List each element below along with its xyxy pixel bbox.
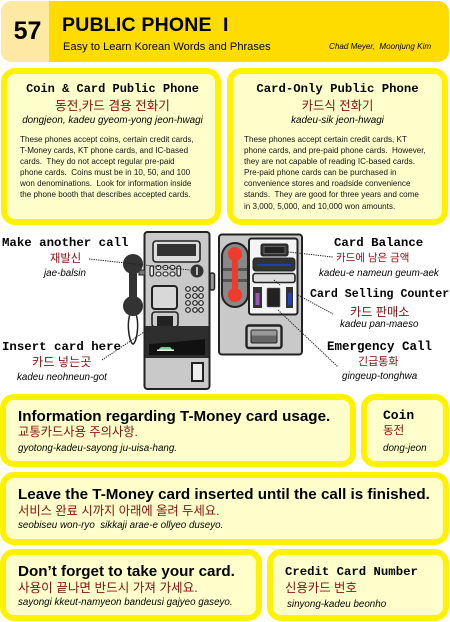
- label korean: 카드에 남은 금액: [336, 252, 409, 264]
- description: they are not capable of reading IC-based cards.: [244, 157, 415, 166]
- description: [244, 135, 426, 211]
- panel: leave the card inserted: [0, 472, 449, 545]
- romanization: dong-jeon: [383, 443, 427, 454]
- label heading: Card Selling Counter: [310, 288, 449, 301]
- term: Coin: [383, 408, 414, 423]
- description: convenience stores and roadside convenience: [244, 179, 410, 188]
- label romanization: kadeu-e nameun geum-aek: [319, 268, 439, 279]
- romanization: gyotong-kadeu-sayong ju-uisa-hang.: [18, 443, 177, 454]
- panel heading: Card-Only Public Phone: [256, 82, 419, 96]
- label korean: 긴급통화: [358, 356, 398, 368]
- korean: 신용카드 번호: [285, 581, 357, 595]
- korean: 사용이 끝나면 반드시 가져 가세요.: [18, 581, 198, 595]
- korean: 서비스 완료 시까지 아래에 올려 두세요.: [18, 504, 220, 518]
- label romanization: jae-balsin: [44, 268, 86, 279]
- label romanization: gingeup-tonghwa: [342, 371, 417, 382]
- label: card selling counter: [310, 288, 449, 330]
- description: phone cards. Coins must be in 10, 50, and 100: [20, 168, 190, 177]
- label: card balance: [319, 236, 440, 279]
- title: PUBLIC PHONE I: [62, 14, 229, 36]
- korean: 동전: [383, 425, 404, 437]
- header banner: [1, 1, 449, 62]
- panel heading: Coin & Card Public Phone: [26, 82, 199, 96]
- label: insert card here: [2, 340, 121, 383]
- romanization: sayongi kkeut-namyeon bandeusi gajyeo gaseyo.: [18, 597, 233, 608]
- panel: t-money information: [0, 394, 356, 467]
- label heading: Make another call: [2, 236, 128, 250]
- panel: coin: [361, 394, 449, 467]
- description: stands. They are good for three years and come: [244, 190, 419, 199]
- card-only phone: [219, 234, 302, 354]
- label romanization: kadeu pan-maeso: [340, 319, 418, 330]
- authors: Chad Meyer, Moonjung Kim: [329, 42, 431, 51]
- label korean: 재발신: [50, 253, 81, 265]
- description: These phones accept certain credit cards, KT: [244, 135, 407, 144]
- label heading: Insert card here: [2, 340, 121, 354]
- panel: don't forget card: [0, 549, 262, 621]
- korean term: 동전,카드 겸용 전화기: [55, 99, 170, 113]
- label heading: Emergency Call: [327, 340, 432, 354]
- leader lines: [89, 252, 338, 367]
- description: won denominations. Look for information inside: [20, 179, 191, 188]
- illustration: two public phones: [88, 231, 338, 390]
- panel: credit card number: [267, 549, 449, 621]
- label heading: Card Balance: [334, 236, 423, 250]
- label romanization: kadeu neohneun-got: [17, 372, 107, 383]
- phrase: Information regarding T-Money card usage.: [18, 408, 330, 425]
- description: [20, 135, 194, 199]
- coin and card phone: [144, 232, 214, 389]
- description: T-Money cards, KT phone cards, and IC-based: [20, 146, 188, 155]
- term: Credit Card Number: [285, 565, 418, 579]
- label: make another call: [2, 236, 128, 279]
- romanization: dongjeon, kadeu gyeom-yong jeon-hwagi: [22, 115, 203, 126]
- korean term: 카드식 전화기: [302, 99, 373, 113]
- romanization: kadeu-sik jeon-hwagi: [291, 115, 384, 126]
- description: cards. They do not accept regular pre-paid: [20, 157, 175, 166]
- label: emergency call: [327, 340, 432, 382]
- lesson number: 57: [14, 17, 41, 45]
- phrase: Leave the T-Money card inserted until the call is finished.: [18, 486, 430, 503]
- handset: [123, 254, 145, 344]
- romanization: sinyong-kadeu beonho: [287, 599, 386, 610]
- description: in 3,000, 5,000, and 10,000 won amounts.: [244, 202, 395, 211]
- panel: card-only public phone: [227, 68, 448, 225]
- description: the phone booth that describes accepted cards.: [20, 190, 191, 199]
- label korean: 카드 판매소: [350, 305, 409, 319]
- romanization: seobiseu won-ryo sikkaji arae-e ollyeo duseyo.: [18, 520, 223, 531]
- label korean: 카드 넣는곳: [32, 355, 91, 369]
- lesson number: [1, 1, 49, 62]
- panel: coin and card public phone: [1, 68, 221, 225]
- description: phone cards, and pre-paid phone cards. However,: [244, 146, 426, 155]
- phrase: Don’t forget to take your card.: [18, 563, 235, 580]
- description: Pre-paid phone cards can be purchased in: [244, 168, 397, 177]
- korean: 교통카드사용 주의사항.: [18, 425, 138, 439]
- subtitle: Easy to Learn Korean Words and Phrases: [63, 41, 271, 53]
- description: These phones accept coins, certain credit cards,: [20, 135, 194, 144]
